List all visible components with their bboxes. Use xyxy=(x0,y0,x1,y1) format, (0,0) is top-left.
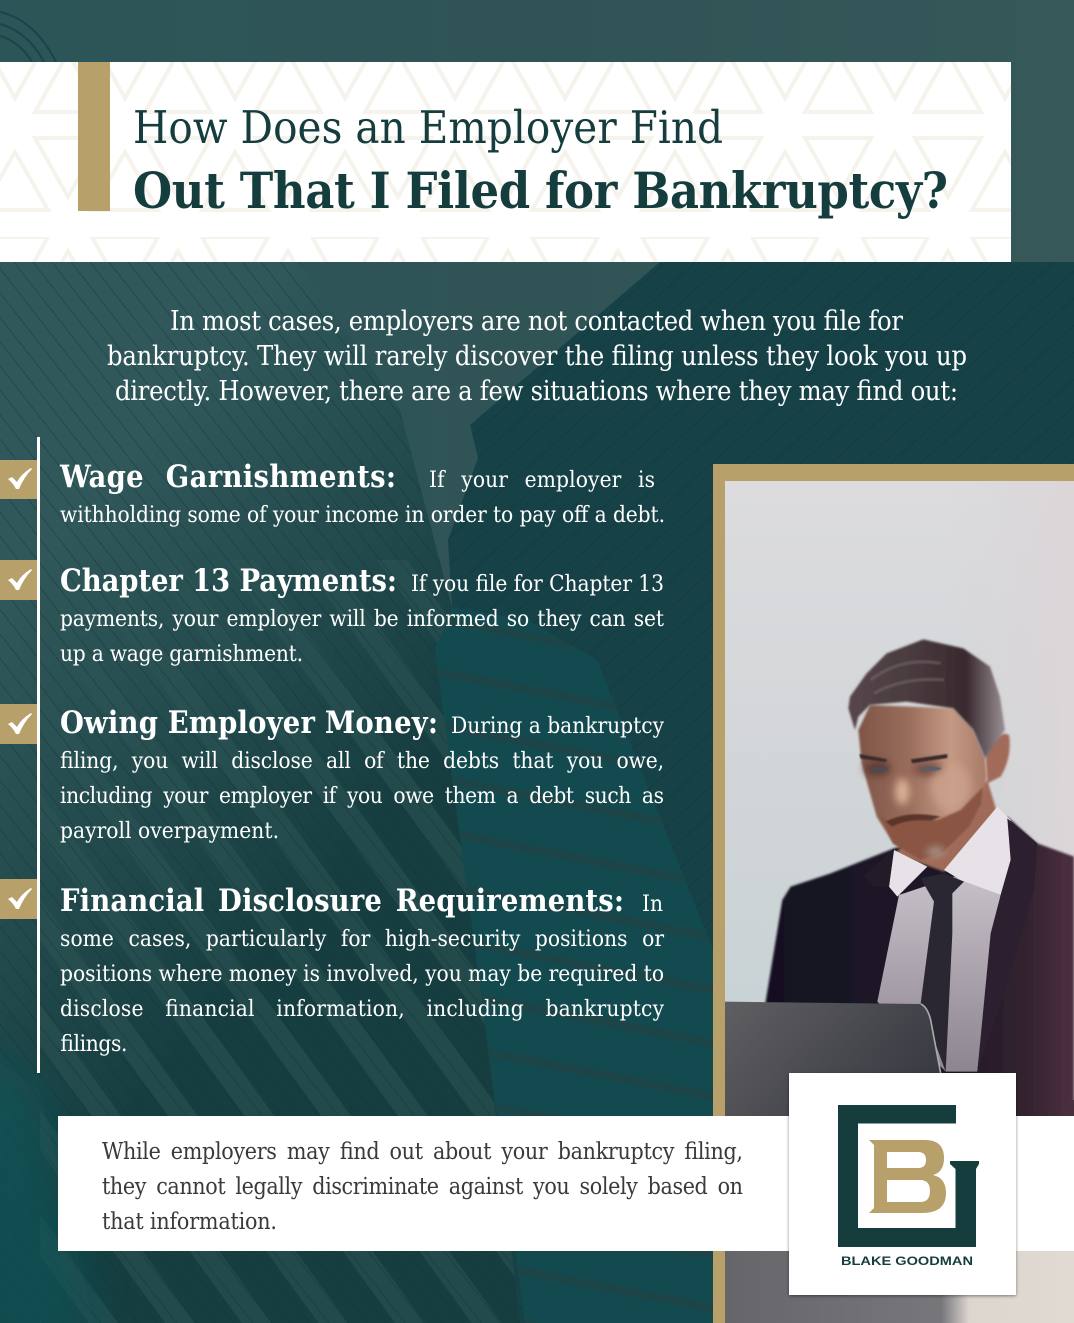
text: chapter 13 payments: payments, your employer will be informed so they can set xyxy=(60,606,664,632)
text: financial disclosure requirements: positions where money is involved, you may be required to xyxy=(60,961,664,987)
intro text xyxy=(107,306,967,407)
mustache xyxy=(886,814,941,827)
item: financial disclosure requirements xyxy=(0,879,665,1057)
ear xyxy=(986,734,1010,783)
closing text xyxy=(102,1139,743,1235)
intro text: In most cases, employers are not contacted when you file for xyxy=(170,306,903,337)
shirt xyxy=(877,877,1001,1072)
text: financial disclosure requirements: disclose financial information, including bankruptcy xyxy=(60,996,665,1022)
title: Out That I Filed for Bankruptcy? xyxy=(133,161,948,220)
text: chapter 13 payments: Chapter 13 Payments: xyxy=(60,563,397,599)
title xyxy=(133,101,948,220)
timeline vertical line xyxy=(37,437,40,1073)
icon: check tab xyxy=(0,460,37,499)
intro text: bankruptcy. They will rarely discover the filing unless they look you up xyxy=(107,341,967,372)
logo frame xyxy=(838,1105,979,1247)
closing text: that information. xyxy=(102,1209,277,1235)
text: chapter 13 payments xyxy=(60,563,664,667)
text: wage garnishments: If your employer is xyxy=(429,467,655,493)
goatee xyxy=(926,846,945,857)
title accent bar xyxy=(78,62,110,211)
closing text: they cannot legally discriminate against you solely based on xyxy=(102,1174,743,1200)
cheek highlight xyxy=(931,763,971,810)
text: financial disclosure requirements: Financial Disclosure Requirements: xyxy=(60,883,624,919)
photo: businessman at laptop with gold frame xyxy=(713,464,1074,1323)
text: wage garnishments xyxy=(59,459,665,528)
logo letter B xyxy=(869,1140,946,1213)
jacket xyxy=(766,817,1074,1120)
logo wordmark: BLAKE GOODMAN xyxy=(841,1254,973,1268)
text: owing employer money: payroll overpayment. xyxy=(60,818,279,844)
text: chapter 13 payments: If you file for Chapter 13 xyxy=(411,571,664,597)
face xyxy=(858,705,987,860)
collar xyxy=(944,807,1011,895)
icon: check tab xyxy=(0,560,37,600)
closing text: While employers may find out about your bankruptcy filing, xyxy=(102,1139,743,1165)
neck xyxy=(894,780,997,872)
item: chapter 13 payments xyxy=(0,560,664,667)
text: wage garnishments: Wage Garnishments: xyxy=(59,459,396,495)
text: financial disclosure requirements: In xyxy=(642,891,663,917)
tie xyxy=(921,873,964,1072)
item: wage garnishments xyxy=(0,459,665,528)
laptop xyxy=(725,1002,941,1247)
text: owing employer money xyxy=(60,705,665,844)
icon: check tab xyxy=(0,879,37,919)
hair xyxy=(848,639,1005,758)
intro text: directly. However, there are a few situations where they may find out: xyxy=(115,376,958,407)
eye shadows xyxy=(864,760,946,777)
text: financial disclosure requirements: some cases, particularly for high-security positions or xyxy=(60,926,664,952)
brows and eyes xyxy=(859,754,947,771)
logo: Blake Goodman xyxy=(789,1073,1016,1295)
text: wage garnishments: withholding some of your income in order to pay off a debt. xyxy=(60,502,665,528)
text: owing employer money: filing, you will disclose all of the debts that you owe, xyxy=(60,748,664,774)
text: chapter 13 payments: up a wage garnishment. xyxy=(60,641,303,667)
panel: closing note xyxy=(58,1116,1074,1251)
item: owing employer money xyxy=(0,704,665,844)
text: owing employer money: including your employer if you owe them a debt such as xyxy=(60,783,664,809)
title: How Does an Employer Find xyxy=(133,101,723,154)
text: financial disclosure requirements xyxy=(60,883,665,1057)
beard xyxy=(879,787,983,860)
lapels xyxy=(977,818,1037,1072)
icon: check tab xyxy=(0,704,37,744)
panel: title banner xyxy=(0,62,1011,262)
text: owing employer money: During a bankruptcy xyxy=(451,713,665,739)
nose highlight xyxy=(895,778,910,805)
text: financial disclosure requirements: filings. xyxy=(60,1031,127,1057)
text: owing employer money: Owing Employer Money: xyxy=(60,705,438,741)
